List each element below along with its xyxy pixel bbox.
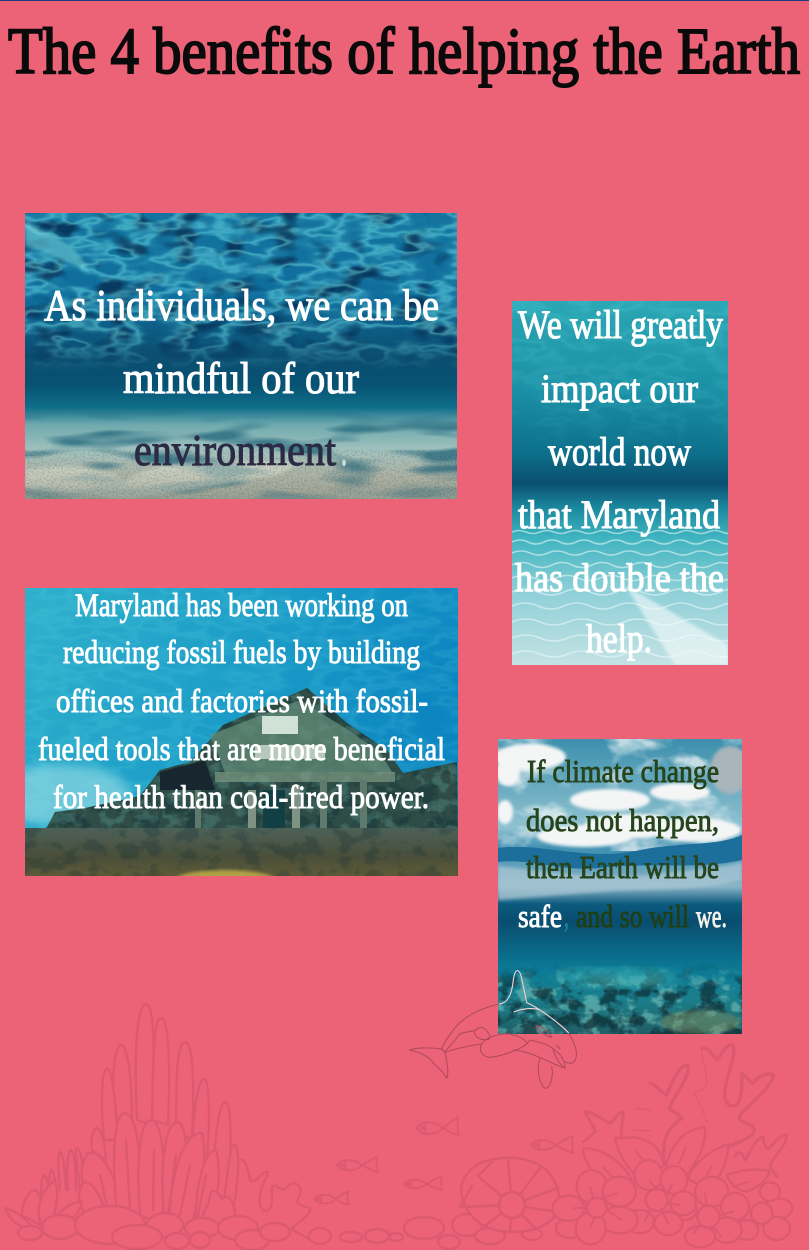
- icon: fish 1: [417, 1117, 459, 1135]
- illustration: left coral cluster: [5, 1004, 290, 1250]
- text block: climate change: we.: [696, 898, 727, 934]
- panel: Maryland fossil fuels: [0, 588, 458, 890]
- text block: double the help: [515, 302, 724, 661]
- photo: sunken temple: [0, 588, 458, 890]
- text block: Maryland: Maryland has been working on: [75, 588, 408, 624]
- illustration: orca outline: [409, 971, 576, 1088]
- text block: double the help: We will greatly: [518, 302, 723, 347]
- illustration: right coral and flowers: [552, 1045, 792, 1247]
- text block: Maryland: offices and factories with fossil-: [56, 684, 428, 720]
- text block: individuals: [44, 281, 439, 475]
- icon: fish 3: [337, 1157, 378, 1172]
- icon: fish 5: [314, 1191, 349, 1205]
- text block: climate change: then Earth will be: [526, 849, 719, 885]
- illustration: small middle coral and pebbles: [240, 1160, 584, 1249]
- text block: individuals: mindful of our: [123, 354, 359, 403]
- text block: double the help: help.: [586, 616, 652, 661]
- icon: fish 4: [404, 1176, 442, 1190]
- text block: Maryland: reducing fossil fuels by building: [63, 635, 420, 671]
- text block: climate change: does not happen,: [526, 802, 719, 838]
- panel: double the help: [512, 301, 746, 665]
- text block: climate change: ,: [564, 898, 569, 934]
- photo: sky and split-level ocean: [494, 739, 750, 1034]
- text block: double the help: world now: [548, 429, 691, 474]
- text block: individuals: As individuals, we can be: [44, 281, 439, 330]
- text block: individuals: environment: [134, 426, 336, 475]
- text block: individuals: .: [341, 426, 347, 475]
- photo: rippled sea floor: [512, 301, 746, 665]
- illustration: scallop shell: [460, 1158, 559, 1232]
- text block: climate change: [518, 753, 727, 934]
- text block: climate change: If climate change: [527, 753, 719, 789]
- text block: double the help: impact our: [541, 366, 698, 411]
- text block: Maryland: [38, 588, 445, 816]
- text block: double the help: that Maryland: [518, 492, 720, 537]
- panel: climate change: [494, 739, 750, 1034]
- panel: individuals: [25, 213, 457, 499]
- text block: double the help: has double the: [515, 555, 724, 600]
- text block: Maryland: fueled tools that are more beneficial: [38, 732, 445, 768]
- text block: climate change: and so will: [576, 898, 689, 934]
- text block: climate change: safe: [518, 898, 562, 934]
- icon: fish 2: [531, 1136, 573, 1153]
- text block: Maryland: for health than coal-fired power.: [53, 780, 429, 816]
- photo: underwater caustics and sand floor: [25, 213, 457, 499]
